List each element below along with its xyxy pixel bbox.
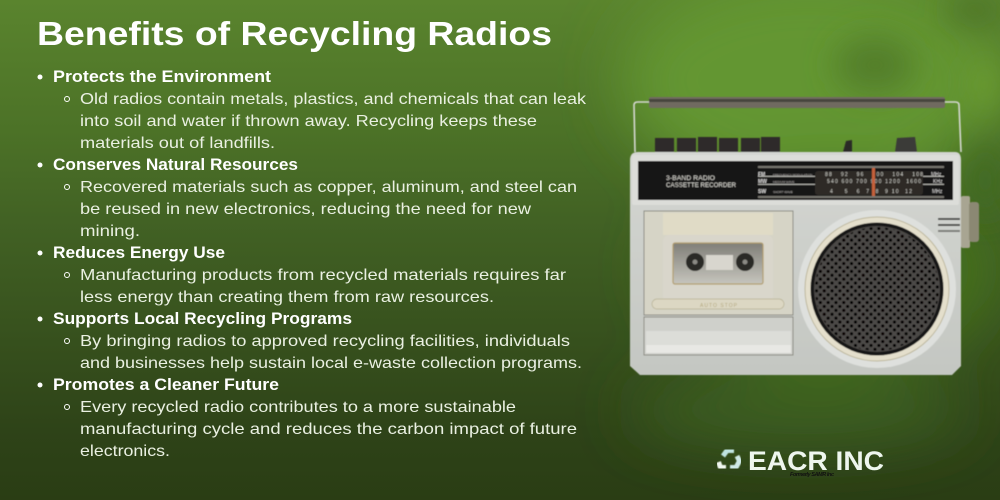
radio illustration [630, 97, 979, 375]
tuning panel: 3-BAND RADIO [666, 176, 715, 182]
icon: recycle symbol [718, 450, 740, 468]
benefit: conserves natural resources: mining. [80, 223, 140, 240]
radio body [630, 152, 961, 375]
tuning panel: 4 5 6 7 8 9 10 12 [830, 189, 912, 195]
speaker [798, 210, 956, 368]
benefit: supports local recycling programs: and businesses help sustain local e-waste collection programs. [80, 355, 582, 372]
benefit: protects the environment: Old radios contain metals, plastics, and chemicals that can leak [80, 91, 587, 108]
benefit: promotes a cleaner future: manufacturing cycle and reduces the carbon impact of future [80, 421, 577, 438]
benefit: promotes a cleaner future [38, 376, 577, 460]
lower door [644, 317, 793, 355]
benefit: protects the environment: materials out of landfills. [80, 135, 275, 152]
tuning panel: CASSETTE RECORDER [666, 183, 737, 189]
cassette door: AUTO STOP [700, 303, 738, 309]
benefit: conserves natural resources: Conserves Natural Resources [53, 156, 298, 174]
benefit: promotes a cleaner future: electronics. [80, 443, 170, 460]
benefit: conserves natural resources: Recovered materials such as copper, aluminum, and steel can [80, 179, 577, 196]
tuning panel: MHz [931, 172, 942, 178]
benefit: supports local recycling programs: By bringing radios to approved recycling facilities, individuals [80, 333, 570, 350]
tape keys [655, 137, 917, 152]
benefit: promotes a cleaner future: Promotes a Cleaner Future [53, 376, 279, 394]
title: Benefits of Recycling Radios [37, 15, 552, 52]
tuning panel: MHz [932, 189, 943, 195]
benefit: protects the environment: into soil and water if thrown away. Recycling keeps these [80, 113, 537, 130]
benefit: conserves natural resources: be reused in new electronics, reducing the need for new [80, 201, 532, 218]
benefit: supports local recycling programs [38, 310, 582, 372]
tuning panel: SHORT WAVE [773, 190, 793, 194]
logo: EACR INC: EACR INC [748, 446, 884, 476]
tuning panel: MW [758, 179, 767, 185]
tuning panel: FM [758, 172, 765, 178]
benefits list [38, 68, 587, 460]
benefit: protects the environment: Protects the Environment [53, 68, 272, 86]
logo: EACR INC: Formerly SAMR Inc [790, 472, 834, 478]
tuning panel [638, 161, 953, 200]
side knob [961, 196, 979, 248]
tuning panel: 540 600 700 900 1200 1600 [827, 179, 921, 185]
benefit: reduces energy use: less energy than creating them from raw resources. [80, 289, 494, 306]
top band [632, 155, 959, 205]
tuning panel: SW [758, 189, 766, 195]
speaker vents [938, 218, 960, 232]
tuning panel: KHz [933, 179, 943, 185]
benefit: reduces energy use [38, 244, 567, 306]
benefit: reduces energy use: Reduces Energy Use [53, 244, 225, 262]
benefit: supports local recycling programs: Supports Local Recycling Programs [53, 310, 352, 328]
handle [634, 97, 961, 152]
benefit: conserves natural resources [38, 156, 577, 240]
benefit: promotes a cleaner future: Every recycled radio contributes to a more sustainable [80, 399, 516, 416]
cassette door [644, 211, 793, 315]
tuning panel: MEDIUM WAVE [773, 180, 794, 184]
benefit: protects the environment [38, 68, 587, 152]
tuning panel: FREQUENCY MODULATION [773, 173, 812, 177]
benefit: reduces energy use: Manufacturing products from recycled materials requires far [80, 267, 567, 284]
tuning panel: 88 92 96 100 104 108 [825, 172, 923, 178]
